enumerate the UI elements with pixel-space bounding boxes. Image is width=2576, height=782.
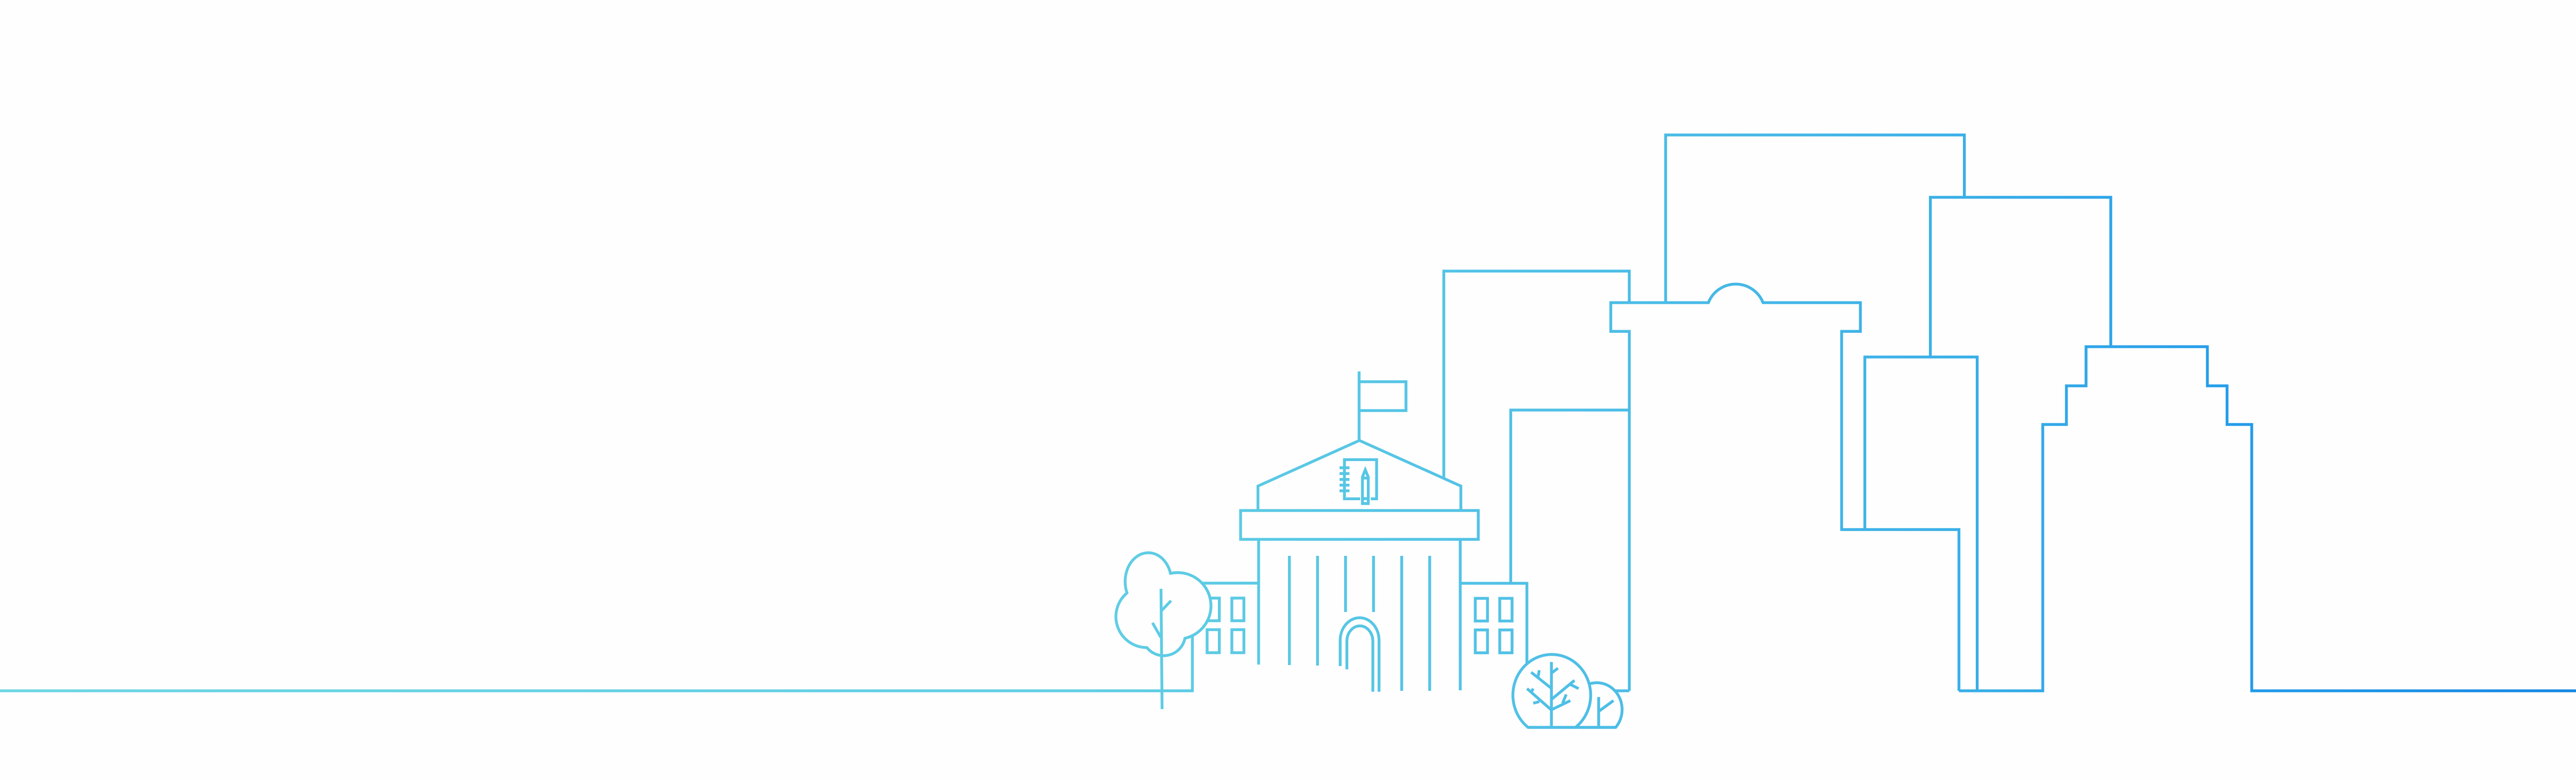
- skyline: narrow box building: [1865, 357, 1977, 691]
- school: flag: [1359, 371, 1406, 440]
- school: columns: [1259, 539, 1460, 691]
- skyline: inner building: [1511, 410, 1629, 583]
- left wing windows: [1207, 598, 1244, 653]
- right wing roof: [1460, 583, 1527, 665]
- school: roof: [1258, 440, 1461, 511]
- tree: left leafy tree: [1116, 553, 1211, 709]
- tree base line: [1528, 726, 1616, 729]
- right wing windows: [1476, 599, 1512, 653]
- tree: small round tree: [1572, 683, 1622, 727]
- school: cornice beam: [1241, 511, 1478, 539]
- skyline: domed building with cap: [1611, 284, 1959, 691]
- school: arched door: [1340, 618, 1379, 692]
- skyline: upper right tower: [1930, 197, 2111, 357]
- icon: notebook and pencil: [1340, 460, 1377, 504]
- skyline: building behind school roof: [1444, 271, 1629, 478]
- skyline: stepped tower and right ground line: [1959, 347, 2576, 691]
- tree: large round tree: [1513, 654, 1590, 727]
- ground segment right of trees: [1613, 689, 1629, 692]
- ground line left: [0, 635, 1192, 691]
- skyline: tall top building: [1666, 135, 1964, 303]
- left wing roof: [1195, 582, 1259, 585]
